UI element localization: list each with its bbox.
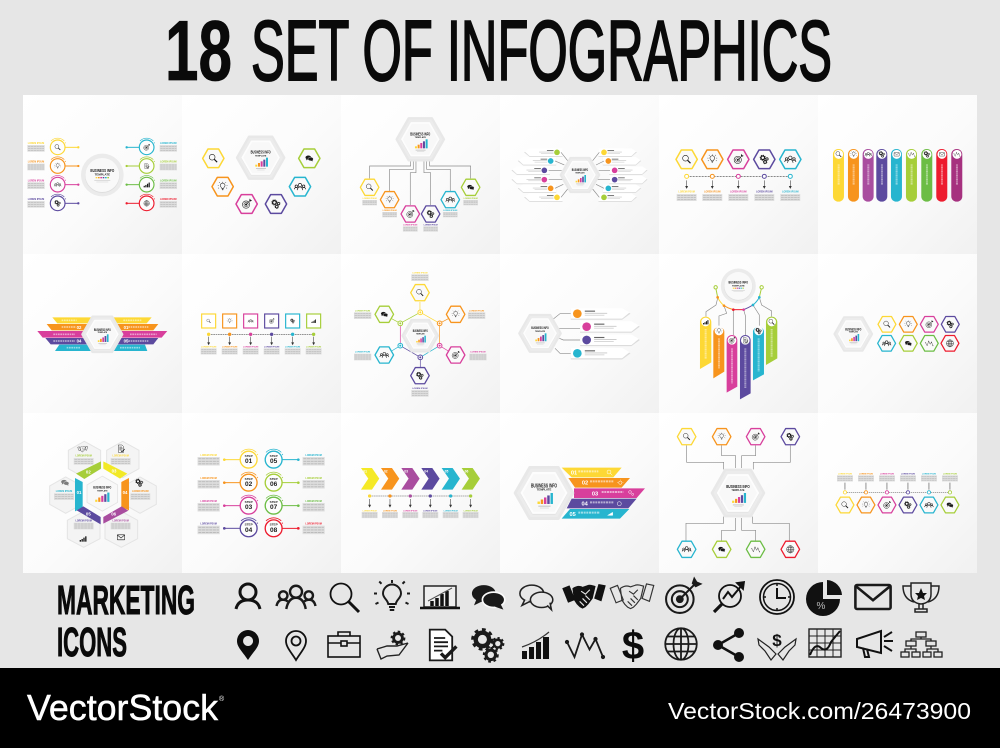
timeline nodes and captions: LOREM IPSUM	[201, 346, 216, 348]
panel 9: radial hexagon network	[354, 272, 487, 397]
captions: LOREM IPSUM	[305, 524, 322, 526]
central circle badge	[81, 154, 124, 196]
icon: envelope	[855, 585, 891, 609]
panel 8: six squares on timeline	[201, 314, 322, 354]
coloured bands and numbers	[75, 461, 129, 524]
timeline nodes and captions: LOREM IPSUM	[704, 192, 721, 194]
right tabs	[598, 148, 648, 202]
panel 15: six chevrons on timeline	[361, 468, 480, 518]
captions and stems: LOREM IPSUM	[859, 473, 873, 475]
chevrons: 02	[384, 470, 388, 474]
icon hexagons and captions: LOREM IPSUM	[443, 210, 458, 212]
icon: clock	[760, 580, 794, 614]
step rings: STEP	[270, 454, 278, 458]
centre hexagon label	[87, 476, 118, 511]
cell contents: LOREM IPSUM	[112, 456, 129, 458]
panel 18: six hexagons under dotted timeline	[836, 473, 959, 513]
panel 12: hexagon badge with eight icon hexagons	[834, 316, 959, 351]
icon hexagons and captions: LOREM IPSUM	[424, 224, 438, 226]
central hexagon badge: BUSINESS INFO	[94, 328, 111, 332]
right ring nodes: LOREM IPSUM	[160, 143, 177, 145]
captions: LOREM IPSUM	[200, 501, 217, 503]
captions: LOREM IPSUM	[305, 501, 322, 503]
panel 6: nine coloured pills	[833, 149, 962, 202]
footer band	[0, 668, 1000, 748]
cell contents: LOREM IPSUM	[75, 456, 92, 458]
marketing icon row 1	[236, 579, 939, 616]
icon: target	[666, 579, 700, 613]
step rings: 05	[270, 458, 278, 465]
captions and stems: LOREM IPSUM	[922, 473, 936, 475]
centre hexagon label: TEMPLATE	[97, 489, 108, 492]
footer logo: VectorStock	[27, 687, 219, 728]
icon: dollar sign: $	[622, 624, 644, 668]
icon hexagons and captions: LOREM IPSUM	[363, 198, 377, 200]
icon: globe	[665, 628, 697, 660]
chevrons: 03	[404, 470, 408, 474]
timeline nodes and captions: LOREM IPSUM	[222, 346, 237, 348]
right ring nodes: LOREM IPSUM	[160, 199, 177, 201]
timeline line	[209, 333, 314, 335]
captions and stems: LOREM IPSUM	[838, 473, 852, 475]
central hexagon badge: BUSINESS INFO	[413, 329, 428, 333]
slanted bars: 05	[570, 512, 576, 518]
dotted timeline	[845, 491, 950, 493]
icon: zigzag line	[566, 633, 604, 658]
captions: LOREM IPSUM	[355, 310, 370, 312]
footer logo: ®	[219, 695, 225, 703]
icon hexagons and captions: LOREM IPSUM	[383, 210, 397, 212]
panel 3: org tree with six hexagons	[360, 118, 480, 232]
coloured wing bars: 05	[124, 339, 129, 344]
central hexagon badge: TEMPLATE	[537, 488, 551, 492]
timeline nodes and captions: LOREM IPSUM	[464, 510, 478, 512]
icon hexagons	[676, 150, 801, 169]
chevrons: 06	[465, 470, 468, 474]
step rings: STEP	[245, 454, 253, 458]
timeline nodes and captions: LOREM IPSUM	[264, 346, 279, 348]
panel 1: circle badge with eight ring nodes	[27, 138, 177, 211]
captions: LOREM IPSUM	[305, 478, 322, 480]
icon: map pin outline	[286, 631, 306, 660]
chevrons	[361, 468, 480, 490]
marketing icons heading: ICONS	[57, 619, 127, 665]
top icon hexagons	[677, 429, 800, 445]
chevrons: 01	[363, 470, 367, 474]
captions: LOREM IPSUM	[305, 455, 322, 457]
step rings: STEP	[270, 500, 278, 504]
hex ring connectors	[392, 302, 448, 367]
marketing icons heading: MARKETING	[57, 577, 195, 623]
right ring nodes: LOREM IPSUM	[160, 162, 177, 164]
central hexagon badge	[515, 467, 573, 519]
step rings	[240, 449, 283, 537]
connector lines	[549, 152, 610, 197]
captions: LOREM IPSUM	[412, 272, 428, 274]
captions: LOREM IPSUM	[355, 352, 370, 354]
central hexagon badge: BUSINESS INFO	[531, 326, 549, 330]
slanted bars: 03	[592, 491, 598, 497]
timeline nodes and captions: LOREM IPSUM	[423, 510, 438, 512]
central hexagon badge	[712, 470, 764, 516]
dashed timeline	[687, 175, 790, 177]
central hexagon badge: TEMPLATE	[415, 136, 427, 139]
left ring nodes: LOREM IPSUM	[28, 180, 44, 182]
timeline nodes and captions: LOREM IPSUM	[243, 346, 258, 348]
chevrons: 04	[424, 470, 428, 474]
central hexagon badge	[402, 320, 438, 352]
ribbons	[700, 317, 777, 399]
step rings: STEP	[245, 523, 253, 527]
panel 11: circle badge with hanging ribbons	[700, 269, 777, 399]
captions and stems: LOREM IPSUM	[901, 473, 915, 475]
icon: gears	[473, 630, 503, 662]
icon: search	[330, 584, 359, 612]
step rings: STEP	[245, 500, 253, 504]
icon: chat filled	[472, 585, 505, 610]
coloured wing bars: 01	[124, 325, 129, 330]
captions	[198, 455, 325, 534]
coloured wing bars: 04	[77, 339, 82, 344]
marketing icons heading	[57, 577, 195, 665]
panel 10: hexagon badge with four white tabs	[519, 308, 640, 359]
central hexagon badge	[237, 137, 284, 179]
central hexagon badge: BUSINESS INFO	[410, 131, 431, 136]
central circle badge: BUSINESS INFO	[90, 168, 115, 173]
coloured bands and numbers: 04	[123, 490, 128, 495]
icon: people	[276, 586, 316, 609]
central hexagon badge: TEMPLATE	[416, 332, 425, 335]
captions and stems: LOREM IPSUM	[880, 473, 894, 475]
icon: person	[236, 584, 260, 609]
icon hexagons and captions: LOREM IPSUM	[464, 198, 478, 200]
captions and stems: LOREM IPSUM	[943, 473, 957, 475]
captions: LOREM IPSUM	[200, 524, 217, 526]
panel 17: hexagon badge with tree to eight hexagons	[677, 429, 800, 557]
pills	[833, 149, 962, 202]
left ring nodes: LOREM IPSUM	[28, 199, 44, 201]
icon: document check	[430, 630, 456, 660]
connector lines with end dots	[223, 458, 300, 530]
slanted bars: 04	[582, 502, 589, 508]
icon: share	[713, 628, 744, 662]
timeline nodes and captions	[201, 333, 322, 354]
connector lines	[706, 297, 772, 335]
central hexagon badge: BUSINESS INFO	[572, 168, 588, 172]
icon: org chart	[901, 632, 942, 657]
central hexagon badge	[519, 315, 561, 352]
central hexagon badge: TEMPLATE	[255, 154, 267, 157]
circle badge: BUSINESS INFO	[728, 281, 748, 285]
icon: handshake outline	[610, 584, 654, 609]
left ring nodes	[27, 138, 79, 211]
step rings: 01	[245, 458, 253, 465]
coloured bands and numbers: 05	[86, 511, 91, 516]
step rings: 02	[245, 481, 253, 488]
icon hexagons	[878, 316, 959, 351]
slanted bars	[562, 468, 645, 519]
panel 14: eight numbered step rings	[198, 449, 325, 537]
central hexagon badge: TEMPLATE	[575, 172, 586, 175]
icon: handshake filled	[562, 584, 606, 609]
cell contents: LOREM IPSUM	[132, 491, 149, 493]
central hexagon badge: BUSINESS INFO	[845, 327, 861, 331]
icon: map pin filled	[237, 630, 259, 660]
title: 18	[165, 4, 232, 99]
centre hexagon label: BUSINESS INFO	[93, 485, 111, 489]
footer url: VectorStock.com/26473900	[668, 698, 971, 724]
icon hexagons	[203, 149, 320, 213]
white honeycomb cells	[50, 441, 156, 547]
panel 7: wing bars around hexagon badge	[37, 316, 167, 352]
step rings: 08	[270, 527, 278, 534]
central hexagon badge	[82, 316, 122, 352]
circle badge	[721, 269, 756, 303]
timeline nodes and captions: LOREM IPSUM	[782, 192, 799, 194]
central hexagon badge: TEMPLATE	[98, 331, 108, 334]
icon squares	[202, 314, 321, 328]
rainbow arc	[714, 286, 763, 311]
icon: pie chart	[806, 580, 842, 616]
captions: LOREM IPSUM	[412, 388, 428, 390]
connector lines	[370, 160, 471, 205]
icon: light bulb	[374, 580, 410, 610]
captions and stems	[837, 473, 958, 494]
ribbon icons	[701, 318, 776, 345]
timeline nodes and captions: LOREM IPSUM	[306, 346, 321, 348]
panel 2: hexagon badge with six icon hexagons	[203, 137, 320, 213]
coloured bands and numbers: 02	[86, 470, 91, 475]
panel 5: five hexagons on dashed timeline	[676, 150, 801, 201]
icon: laptop chart	[420, 586, 460, 608]
timeline	[370, 494, 471, 498]
panel 4: hexagon badge with twelve label tabs	[511, 148, 648, 202]
timeline nodes and captions: LOREM IPSUM	[444, 510, 458, 512]
timeline nodes and captions	[677, 174, 800, 201]
chevrons: 05	[445, 470, 448, 474]
title	[165, 4, 832, 99]
timeline nodes and captions: LOREM IPSUM	[363, 510, 377, 512]
icon hexagons and captions	[360, 179, 480, 232]
icon: growth bars	[522, 632, 549, 659]
cell contents: LOREM IPSUM	[75, 520, 92, 522]
captions: LOREM IPSUM	[200, 478, 217, 480]
central hexagon badge: TEMPLATE	[849, 331, 858, 334]
icon: chat outline	[520, 585, 553, 610]
step rings: 06	[270, 481, 278, 488]
icon: pie chart: %	[817, 601, 826, 612]
step rings: STEP	[270, 523, 278, 527]
circle badge: TEMPLATE	[732, 284, 745, 287]
bar icons	[607, 470, 634, 515]
pill icons	[834, 150, 961, 159]
captions: LOREM IPSUM	[470, 352, 486, 354]
icon hexagons and captions: LOREM IPSUM	[403, 224, 418, 226]
icon: hands with dollar: $	[772, 631, 782, 650]
timeline nodes and captions: LOREM IPSUM	[678, 192, 695, 194]
left tabs	[511, 148, 563, 202]
cell contents	[54, 445, 150, 542]
panel backgrounds grid	[23, 95, 977, 573]
cell contents: LOREM IPSUM	[56, 491, 72, 493]
central hexagon badge: BUSINESS INFO	[531, 483, 557, 489]
cell contents: LOREM IPSUM	[112, 520, 129, 522]
central hexagon badge: BUSINESS INFO	[251, 150, 271, 155]
timeline nodes and captions: LOREM IPSUM	[403, 510, 418, 512]
step rings: 07	[270, 504, 278, 511]
step rings: STEP	[270, 477, 278, 481]
central hexagon badge: TEMPLATE	[535, 330, 546, 333]
marketing icon row 2	[237, 624, 942, 668]
icon: briefcase	[328, 632, 360, 657]
captions: LOREM IPSUM	[469, 310, 484, 312]
icon: line chart grid	[809, 629, 841, 657]
step rings: 04	[245, 527, 253, 534]
left ring nodes: LOREM IPSUM	[28, 162, 44, 164]
central hexagon badge	[561, 158, 599, 192]
central hexagon badge: TEMPLATE	[731, 488, 745, 492]
timeline nodes and captions: LOREM IPSUM	[383, 510, 397, 512]
icon: hand with gear	[377, 632, 408, 659]
captions	[354, 272, 487, 397]
central hexagon badge: BUSINESS INFO	[726, 484, 750, 490]
right ring nodes: LOREM IPSUM	[160, 180, 177, 182]
central hexagon badge	[397, 118, 444, 160]
step rings: STEP	[245, 477, 253, 481]
slanted bars: 01	[571, 471, 577, 477]
left ring nodes: LOREM IPSUM	[28, 143, 44, 145]
white tabs	[571, 308, 640, 359]
panel 16: hexagon badge with five slanted bars	[515, 467, 645, 519]
coloured wing bars: 02	[77, 325, 82, 330]
central circle badge: TEMPLATE	[95, 174, 111, 177]
timeline nodes and captions: LOREM IPSUM	[730, 192, 747, 194]
outer icon hexagons	[375, 285, 465, 384]
icon: trophy	[903, 583, 939, 612]
right ring nodes	[125, 138, 177, 211]
captions: LOREM IPSUM	[200, 455, 217, 457]
connector lines	[686, 445, 790, 541]
panel 13: honeycomb of white hexagons	[50, 441, 156, 547]
icon: megaphone	[857, 631, 893, 657]
icon: hands with dollar	[758, 631, 796, 660]
coloured bands and numbers: 06	[111, 511, 117, 516]
timeline nodes and captions	[362, 494, 479, 518]
icon: growth magnifier	[714, 582, 744, 612]
coloured bands and numbers: 01	[77, 490, 82, 495]
slanted bars: 02	[582, 481, 588, 487]
icon hexagons	[836, 497, 959, 513]
coloured bands and numbers: 03	[112, 469, 117, 474]
timeline nodes and captions: LOREM IPSUM	[756, 192, 773, 194]
central hexagon badge	[834, 317, 872, 351]
coloured wing bars	[37, 317, 167, 351]
timeline nodes and captions: LOREM IPSUM	[285, 346, 300, 348]
step rings: 03	[245, 504, 253, 511]
connector lines	[553, 314, 583, 353]
bottom icon hexagons	[677, 541, 800, 557]
